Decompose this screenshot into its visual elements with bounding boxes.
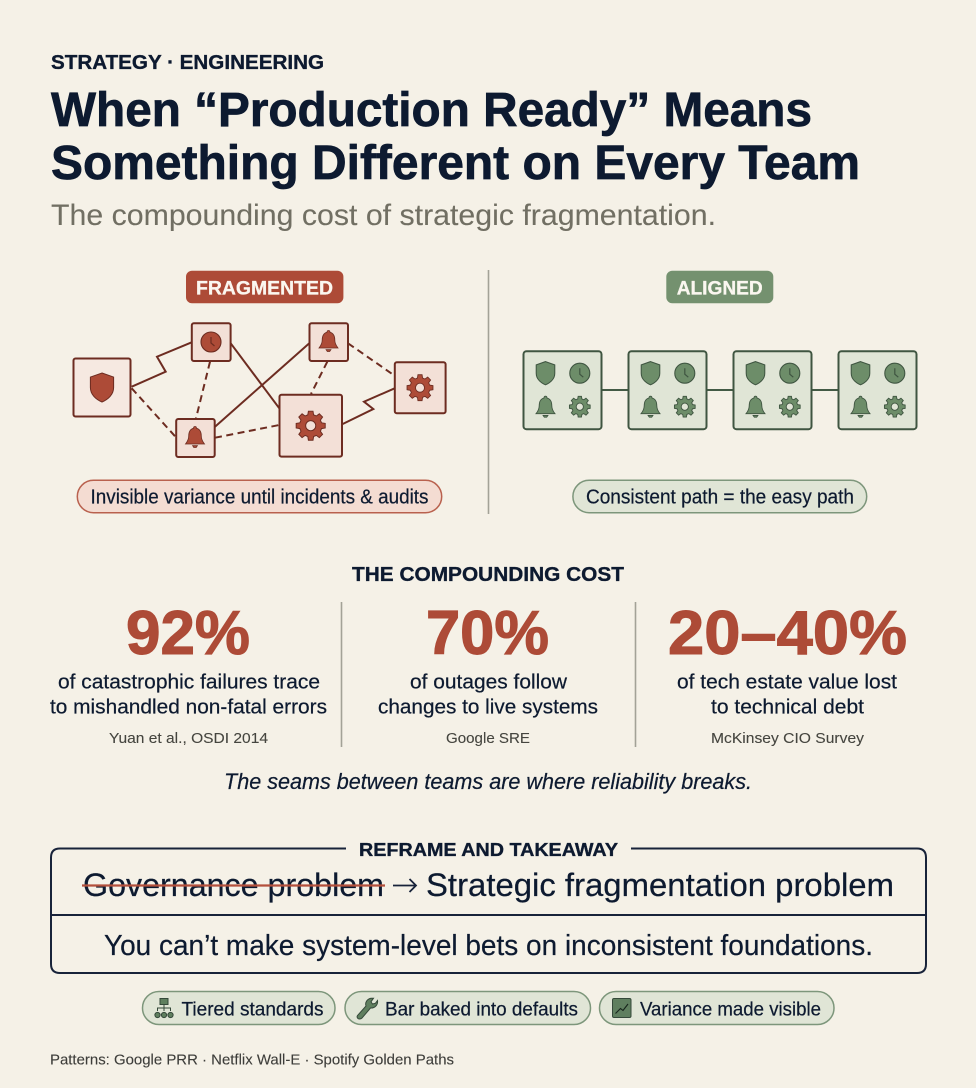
pill: fragmented caption: [77, 480, 442, 513]
stat: 70%: [378, 599, 598, 747]
subtitle: The compounding cost of strategic fragmentation.: [51, 199, 716, 232]
struck-out phrase: Governance problem: [83, 867, 384, 903]
stat: 70%: Google SRE: [446, 731, 530, 747]
badge: aligned: [666, 271, 773, 303]
icon: wrench: [357, 998, 378, 1019]
stat: 70%: of outages follow: [410, 670, 567, 694]
stat: 20–40%: 20–40%: [668, 599, 907, 668]
stat: 92%: 92%: [126, 599, 250, 668]
frame: [51, 848, 926, 973]
node: clock: [192, 323, 231, 361]
standard module 4: [838, 351, 916, 429]
badge: fragmented: FRAGMENTED: [196, 278, 333, 300]
italic statement: The seams between teams are where reliability breaks.: [224, 769, 752, 794]
network connectors: [132, 342, 395, 438]
panel: fragmented: [74, 271, 446, 513]
stat: 70%: 70%: [426, 599, 549, 668]
icon: trend chart: [612, 998, 631, 1018]
panel heading: REFRAME AND TAKEAWAY: [359, 839, 619, 860]
chip: variance made visible: Variance made visible: [640, 1000, 821, 1020]
stat: 92%: to mishandled non-fatal errors: [50, 696, 327, 718]
eyebrow: STRATEGY · ENGINEERING: [51, 51, 324, 74]
chip: tiered standards: [142, 992, 335, 1024]
badge: aligned: ALIGNED: [677, 278, 763, 300]
section heading: compounding cost: THE COMPOUNDING COST: [352, 564, 624, 586]
stat: 70%: changes to live systems: [378, 696, 598, 718]
pill: aligned caption: [573, 480, 867, 513]
footer: patterns: Patterns: Google PRR · Netflix Wall-E · Spotify Golden Paths: [50, 1052, 454, 1068]
pill: fragmented caption: Invisible variance until incidents & audits: [90, 486, 428, 508]
stat: 20–40%: McKinsey CIO Survey: [711, 731, 865, 747]
reframed phrase: Strategic fragmentation problem: [426, 867, 894, 903]
pill: aligned caption: Consistent path = the easy path: [586, 486, 854, 508]
stat: 20–40%: [668, 599, 907, 747]
standard module 3: [734, 351, 812, 429]
node: large gear: [280, 395, 342, 457]
stat: 20–40%: of tech estate value lost: [677, 670, 897, 694]
chip: bar baked into defaults: [345, 992, 590, 1024]
connectors: [602, 389, 838, 391]
node: right gear: [395, 362, 446, 413]
chip: bar baked into defaults: Bar baked into defaults: [385, 1000, 578, 1020]
arrow: [393, 879, 416, 892]
stat: 92%: of catastrophic failures trace: [58, 670, 320, 694]
node: upper bell: [310, 323, 348, 361]
panel: reframe and takeaway: [51, 839, 926, 973]
title: [51, 84, 860, 190]
icon: hierarchy: [155, 998, 173, 1018]
chip: tiered standards: Tiered standards: [182, 1000, 324, 1020]
stat: 20–40%: to technical debt: [711, 696, 864, 718]
node: lower bell: [176, 419, 215, 457]
node: shield: [74, 358, 130, 416]
chip: variance made visible: [600, 992, 834, 1024]
title: Something Different on Every Team: [51, 137, 860, 190]
stat: 92%: [50, 599, 327, 747]
standard module 1: [524, 351, 602, 429]
standard module 2: [628, 351, 706, 429]
takeaway: You can’t make system-level bets on inconsistent foundations.: [104, 930, 873, 962]
stat: 92%: Yuan et al., OSDI 2014: [109, 731, 268, 747]
panel: aligned: [524, 271, 916, 513]
title: When “Production Ready” Means: [51, 84, 812, 137]
badge: fragmented: [186, 271, 343, 303]
